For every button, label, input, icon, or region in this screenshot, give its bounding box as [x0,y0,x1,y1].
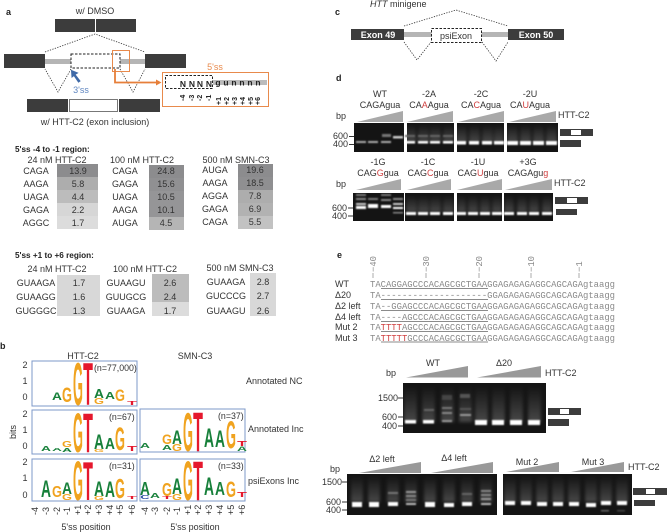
bits axis: 0 [22,392,28,402]
logo: annotated Inc SMN-C3: T [237,440,247,448]
logo: annotated Inc SMN-C3: A [237,446,247,453]
bottom gel labels: bp [330,464,340,474]
logo: annotated Inc SMN-C3: A [140,442,150,450]
label d: d [336,73,342,83]
table: 100 nM HTT-C2: GUAAGA [107,306,145,316]
x axis labels left: +6 [127,505,137,515]
panel: d mutant gels [332,73,593,221]
table: 24 nM HTT-C2: 1.7 [72,218,84,228]
sequence names: WT [335,279,349,289]
logo: psiExons HTT-C2: G [115,472,125,504]
logo: annotated NC HTT-C2: G [94,397,104,406]
5'ss callout box: g [215,78,221,88]
row 2 labels: CAGAgug [508,168,548,178]
logo: annotated Inc HTT-C2: (n=67) [109,412,135,422]
WT and delta-20 gel [403,383,546,433]
logo: annotated Inc HTT-C2: A [62,447,72,454]
table: 24 nM HTT-C2: 2.2 [72,205,84,215]
table: 500 nM SMN-C3: GUAAGA [207,277,245,287]
row 1 ticks: 400 [333,139,348,149]
logo: annotated Inc HTT-C2: A [94,430,104,454]
logo: annotated Inc SMN-C3: G [162,431,172,447]
logo: annotated Inc HTT-C2: G [62,440,72,449]
label e: e [337,250,342,260]
table: 100 nM HTT-C2: CAGA [112,166,138,176]
bits axis: bits [8,424,18,439]
x axis labels right: -3 [150,507,160,515]
table: 500 nM SMN-C3: 2.8 [257,277,269,287]
WT and delta-20 gel labels: Δ20 [496,358,512,368]
table: 24 nM HTT-C2: 24 nM HTT-C2 [27,264,87,274]
table: 24 nM HTT-C2: 13.9 [69,166,87,176]
logo: psiExons HTT-C2: A [41,476,51,503]
logo: annotated Inc HTT-C2: A [105,436,115,453]
logo: annotated Inc HTT-C2: G [94,448,104,453]
section title: 5'ss +1 to +6 region: [15,251,94,260]
5'ss callout box: -3 [189,95,196,101]
table section: 5'ss -4 to -1 [15,145,273,230]
logo: annotated Inc SMN-C3: A [172,427,182,449]
5'ss label: 5'ss [207,62,223,72]
WT and delta-20 gel labels [386,358,576,378]
row 2 labels: -1C [421,157,436,167]
panel: c HTT minigene [335,0,564,61]
orange 5'ss highlight [112,50,130,72]
sequence names: Δ4 left [335,312,361,322]
logo: annotated NC HTT-C2: G [73,352,83,419]
logo: annotated Inc HTT-C2: A [52,448,63,452]
x axis labels left: +3 [94,505,104,515]
table: 100 nM HTT-C2: GUAAGU [106,278,146,288]
x axis labels right: +2 [193,505,203,515]
x axis labels right: -2 [162,507,172,515]
logo: annotated Inc SMN-C3: T [193,401,203,463]
logo: psiExons HTT-C2: G [94,495,104,502]
position ruler: −30 [422,256,432,272]
table: 24 nM HTT-C2: 24 nM HTT-C2 [27,155,87,165]
sequences: TA----AGCCCACAGCGCTGAAGGAGAGAGAGGCAGCAGAgtaagg [370,313,615,323]
logo: annotated Inc SMN-C3: G [226,414,236,457]
logo: psiExons HTT-C2: (n=31) [109,461,135,471]
row 1 labels: -2C [474,89,489,99]
HTT-C2 included exon [27,99,160,112]
bottom gel ticks: 1500 [322,477,342,487]
logo: annotated Inc SMN-C3: G [172,443,182,454]
panel: b sequence logos [0,341,304,532]
x axis labels left: -1 [62,507,72,515]
table: 500 nM SMN-C3: 2.6 [257,306,269,316]
logo: psiExons SMN-C3: T [237,491,247,499]
column heading HTT-C2: HTT-C2 [67,351,99,361]
table: 500 nM SMN-C3: CAGA [202,217,228,227]
logo: annotated NC HTT-C2 [32,352,138,419]
table: 100 nM HTT-C2: 100 nM HTT-C2 [113,264,177,274]
5'ss callout box: N [206,79,212,89]
section title: 5'ss -4 to -1 region: [15,145,90,154]
position ruler [369,256,585,278]
bottom gel ticks: 600 [326,497,341,507]
x axis labels left: +2 [83,505,93,515]
x axis labels right: +3 [204,505,214,515]
logo: psiExons SMN-C3: T [193,450,203,512]
label c: c [335,7,340,17]
bottom gels [347,474,632,515]
table: 100 nM HTT-C2: GUUGCG [106,292,146,302]
bits axis: 0 [22,490,28,500]
sequence names: Mut 3 [335,333,358,343]
sequences: TATTTTAGCCCACAGCGCTGAAGGAGAGAGAGGCAGCAGAgtaagg [370,323,615,333]
logo: annotated NC HTT-C2: A [94,387,104,401]
bottom gel ticks: 400 [326,505,341,515]
row 2 labels: CAGGgua [357,168,399,178]
x axis labels left [30,505,137,515]
logo: annotated Inc HTT-C2: T [83,402,93,464]
bits axis: 2 [22,409,28,419]
row 1 labels: -2U [523,89,537,99]
table: 500 nM SMN-C3: 500 nM SMN-C3 [206,263,274,273]
table: 500 nM SMN-C3: 2.7 [257,291,269,301]
table: 500 nM SMN-C3: GAGA [202,204,228,214]
sequence names [335,279,361,343]
bits axis: 1 [22,376,28,386]
table: 24 nM HTT-C2: GUAAGA [17,278,55,288]
5'ss callout box: -4 [180,95,187,101]
table: 24 nM HTT-C2: AGGC [23,218,50,228]
x axis labels right: +1 [183,505,193,515]
table: 24 nM HTT-C2: 1.3 [73,306,85,316]
WT gel ticks: 400 [382,421,397,431]
table: 24 nM HTT-C2 [23,155,98,229]
position ruler: −10 [527,256,537,272]
bits axis: 2 [22,360,28,370]
bits axis [8,360,28,500]
table: 500 nM SMN-C3: 19.6 [246,165,264,175]
row 2 ticks: 400 [332,211,347,221]
blue arrow 3'ss [72,70,80,82]
logo: annotated Inc SMN-C3: A [162,444,172,452]
sequence names: Δ2 left [335,301,361,311]
row 1 triangles [357,111,556,122]
bottom gel labels: Δ2 left [369,454,395,464]
table: 500 nM SMN-C3: 6.9 [249,204,261,214]
logo: annotated NC HTT-C2: A [105,390,115,401]
row labels: Annotated Inc [248,424,304,434]
table: 100 nM HTT-C2: 2.6 [164,278,176,288]
minigene structure [351,28,564,42]
5'ss callout box: -1 [206,95,213,101]
table section: 5'ss +1 to +6 [15,251,276,316]
5'ss callout box: +6 [255,97,262,105]
5'ss callout box: +2 [224,97,231,105]
5'ss callout box [162,72,268,106]
table: 500 nM SMN-C3: GUCCCG [206,291,246,301]
bits axis: 1 [22,425,28,435]
row 1 labels: CAGAgua [360,100,400,110]
x axis title left: 5'ss position [61,522,111,532]
row 2 labels: HTT-C2 [554,178,586,188]
x axis labels left: -4 [30,507,40,515]
DMSO spliced exons [55,19,136,32]
row 1 labels: HTT-C2 [558,110,590,120]
logo: psiExons SMN-C3: C [140,495,150,501]
logo: annotated Inc HTT-C2 [32,401,137,464]
bottom gel labels: Mut 3 [582,457,604,467]
logo: psiExons SMN-C3: T [162,495,173,500]
row 1 product icons [560,129,593,147]
5'ss callout box: n [255,78,261,88]
table: 500 nM SMN-C3: 500 nM SMN-C3 [202,155,270,165]
logo: annotated NC HTT-C2: (n=77,000) [94,363,137,373]
sequences: TATTTTTGCCCACAGCGCTGAAGGAGAGAGAGGCAGCAGAgtaagg [370,334,615,344]
table: 24 nM HTT-C2: GUGGGC [15,306,57,316]
5'ss callout box: n [231,78,237,88]
logo: psiExons HTT-C2: T [127,495,138,500]
row 1 labels: CAUAgua [510,100,550,110]
row 1 ticks [333,131,354,149]
x axis labels right [140,505,247,515]
logo: psiExons HTT-C2: T [83,451,93,512]
logo: psiExons HTT-C2: G [73,449,83,512]
row 2 labels: -1U [471,157,485,167]
WT gel product icons [548,408,581,426]
x axis labels left: +5 [115,505,125,515]
bits axis: 2 [22,457,28,467]
5'ss callout box: +3 [232,97,239,105]
logo: psiExons HTT-C2: A [94,477,104,501]
5'ss callout box: N [189,79,195,89]
minigene structure: psiExon [440,31,472,41]
row 2 product icons [555,197,588,215]
logo: psiExons HTT-C2: A [62,480,72,498]
logo: annotated Inc SMN-C3: A [215,426,225,453]
row 2 gels [353,193,553,221]
table: 500 nM SMN-C3: 18.5 [246,178,264,188]
logo: annotated Inc HTT-C2: T [127,445,137,453]
table: 100 nM HTT-C2: UAGA [112,192,138,202]
table: 500 nM SMN-C3: AUGA [202,165,228,175]
table: 500 nM SMN-C3: AAGA [202,178,228,188]
logo: annotated Inc SMN-C3: (n=37) [218,411,244,421]
x axis title right: 5'ss position [170,522,220,532]
minigene structure: Exon 50 [519,30,553,40]
logo: annotated NC HTT-C2: A [52,390,62,403]
logo: annotated NC HTT-C2: G [62,383,72,407]
logo: psiExons HTT-C2 [32,449,138,512]
orange arrow [115,69,162,86]
logo: psiExons SMN-C3 [140,449,247,512]
WT and delta-20 gel labels: bp [386,368,396,378]
table: 500 nM SMN-C3 [206,263,276,316]
table: 24 nM HTT-C2: 4.4 [72,192,84,202]
logo: psiExons SMN-C3: G [226,477,236,502]
table: 100 nM HTT-C2 [110,155,184,230]
logo: psiExons SMN-C3: A [204,474,214,501]
x axis labels right: +4 [215,505,225,515]
bottom gel product icons [633,488,667,506]
label b: b [0,341,6,351]
column heading SMN-C3: SMN-C3 [178,351,212,361]
label a: a [6,7,12,17]
bottom gel labels: Δ4 left [441,453,467,463]
row 1 labels: -2A [422,89,436,99]
table: 100 nM HTT-C2: 15.6 [157,179,175,189]
sequences: TA--------------------GGAGAGAGAGGCAGCAGAgtaagg [370,291,615,301]
table: 24 nM HTT-C2: UAGA [23,192,49,202]
WT gel ticks: 1500 [378,393,398,403]
bits axis: 0 [22,441,28,451]
table: 100 nM HTT-C2: AAGA [112,205,138,215]
HTT-C2 heading: w/ HTT-C2 (exon inclusion) [40,117,149,127]
table: 500 nM SMN-C3: GUAAGU [206,306,246,316]
row 1 labels: CAAAgua [409,100,449,110]
x axis labels right: -1 [172,507,182,515]
bottom gel ticks [322,477,347,515]
table: 24 nM HTT-C2 [15,264,100,316]
pre-mRNA row [4,54,186,68]
5'ss callout box: +1 [216,97,223,105]
logo: annotated NC HTT-C2: T [127,400,138,406]
table: 100 nM HTT-C2: 4.5 [160,218,172,228]
table: 500 nM SMN-C3: AGGA [202,191,228,201]
sequences: TACAGGAGCCCACAGCGCTGAAGGAGAGAGAGGCAGCAGAgtaagg [370,280,615,290]
dotted splice lines [404,10,508,61]
x axis labels right: +6 [237,505,247,515]
logo: psiExons SMN-C3: (n=33) [218,461,244,471]
table: 100 nM HTT-C2: 10.5 [157,192,175,202]
table: 24 nM HTT-C2: 1.7 [73,278,85,288]
row 2 ticks: 600 [332,203,347,213]
bottom gel labels: Mut 2 [516,457,538,467]
3'ss label: 3'ss [73,85,89,95]
logo: psiExons SMN-C3: A [150,492,160,500]
logo: annotated Inc SMN-C3: A [204,424,214,453]
5'ss callout box: n [247,78,253,88]
bottom gel triangles [359,462,624,473]
row 1 ticks: 600 [333,131,348,141]
logo: annotated Inc HTT-C2: G [115,422,125,458]
x axis labels left: +4 [105,505,115,515]
table: 100 nM HTT-C2: 10.1 [157,205,175,215]
logo: psiExons HTT-C2: G [52,483,62,500]
x axis labels right: +5 [226,505,236,515]
row 1 gels [354,123,558,152]
logo: psiExons SMN-C3: A [140,479,150,500]
logo: psiExons HTT-C2: A [105,477,115,502]
logo: psiExons SMN-C3: G [183,449,193,512]
row 2 labels: CAGCgua [407,168,449,178]
table: 24 nM HTT-C2: 5.8 [72,179,84,189]
logo: annotated Inc HTT-C2: G [73,401,83,464]
panel: a splicing diagram [4,6,268,127]
position ruler: −20 [475,256,485,272]
logo: psiExons SMN-C3: G [162,481,172,501]
x axis labels left: -3 [41,507,51,515]
position ruler: −40 [369,256,379,272]
table: 500 nM SMN-C3: 7.8 [249,191,261,201]
bits axis: 1 [22,473,28,483]
panel: e sequence alignment and gels [322,250,667,515]
logo: annotated Inc SMN-C3: G [183,403,193,463]
row labels [246,376,304,486]
sequences [370,280,615,344]
WT and delta-20 gel labels: WT [426,358,440,368]
table: 500 nM SMN-C3: 5.5 [249,217,261,227]
row 2 labels: -1G [370,157,386,167]
WT gel ticks: 600 [382,412,397,422]
5'ss callout box: +5 [248,97,255,105]
5'ss callout box: u [223,78,229,88]
row 2 labels: CAGUgua [457,168,499,178]
sequence names: Mut 2 [335,322,358,332]
dotted intron junction [45,34,145,92]
row labels: psiExons Inc [248,476,300,486]
table: 24 nM HTT-C2: CAGA [23,166,49,176]
x axis labels right: -4 [140,507,150,515]
sequence names: Δ20 [335,290,351,300]
5'ss callout box: N [197,79,203,89]
row 2 triangles [356,179,552,190]
5'ss callout box: N [180,79,186,89]
table: 100 nM HTT-C2: 100 nM HTT-C2 [110,155,174,165]
5'ss callout box: +4 [240,97,247,105]
bottom gel labels [330,453,660,474]
row 1 labels: bp [336,111,346,121]
row 2 labels: +3G [519,157,537,167]
row 1 labels [336,89,590,121]
x axis labels left: -2 [52,507,62,515]
logo: psiExons SMN-C3: G [172,493,182,502]
table: 24 nM HTT-C2: AAGA [23,179,49,189]
table: 24 nM HTT-C2: GAGA [23,205,49,215]
row 1 labels: WT [373,89,387,99]
row 2 labels: bp [336,179,346,189]
table: 100 nM HTT-C2: AUGA [112,218,138,228]
logo: psiExons SMN-C3: A [172,474,182,499]
logo: psiExons SMN-C3: A [215,479,225,500]
table: 24 nM HTT-C2: GUAAGG [16,292,56,302]
DMSO heading: w/ DMSO [75,6,114,16]
position ruler: −1 [575,261,585,272]
x axis labels left: +1 [73,505,83,515]
logo: annotated Inc SMN-C3 [140,401,247,463]
WT and delta-20 gel labels: HTT-C2 [545,368,576,378]
row 2 labels [336,157,586,189]
table: 100 nM HTT-C2: 1.7 [164,306,176,316]
sequences: TA--GGAGCCCACAGCGCTGAAGGAGAGAGAGGCAGCAGAgtaagg [370,302,615,312]
table: 100 nM HTT-C2: 2.4 [164,292,176,302]
row labels: Annotated NC [246,376,303,386]
table: 500 nM SMN-C3 [202,155,273,229]
bottom gel labels: HTT-C2 [628,462,660,472]
row 1 labels: CACAgua [461,100,501,110]
table: 24 nM HTT-C2: 1.6 [73,292,85,302]
5'ss callout box: -2 [197,95,204,101]
5'ss callout box: n [239,78,245,88]
WT and delta-20 triangles [406,366,541,378]
logo: psiExons HTT-C2: G [62,493,72,502]
logo: annotated NC HTT-C2: G [115,386,125,405]
minigene structure: Exon 49 [361,30,395,40]
table: 100 nM HTT-C2 [106,264,189,316]
table: 100 nM HTT-C2: 24.8 [157,166,175,176]
table: 100 nM HTT-C2: GAGA [112,179,138,189]
logo: annotated Inc HTT-C2: A [41,445,51,453]
logo: annotated NC HTT-C2: T [83,352,93,419]
row 2 ticks [332,203,353,221]
WT gel ticks [378,393,403,431]
